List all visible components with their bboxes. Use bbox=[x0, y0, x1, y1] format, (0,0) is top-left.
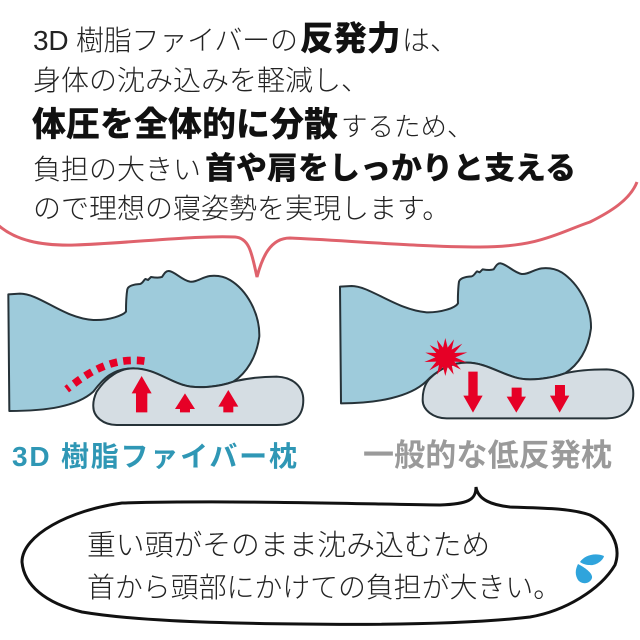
bubble text: 重い頭がそのまま沈み込むため bbox=[87, 530, 490, 562]
main explanatory text: ので理想の寝姿勢を実現します。 bbox=[33, 193, 450, 224]
up arrows bbox=[132, 376, 238, 412]
main explanatory text: 3D 樹脂ファイバーの bbox=[33, 25, 298, 56]
speech bubble: black outline bbox=[22, 487, 617, 624]
main explanatory text: 首や肩をしっかりと支える bbox=[205, 151, 576, 186]
speech bubble: red outline bbox=[0, 182, 637, 277]
icon: sweat drops bbox=[576, 554, 604, 583]
dashed neck support curve bbox=[67, 360, 148, 389]
bubble text bbox=[87, 530, 561, 603]
main explanatory text bbox=[32, 21, 576, 224]
main explanatory text: は、 bbox=[402, 25, 458, 56]
label: 3D resin fiber pillow: 3D 樹脂ファイバー枕 bbox=[12, 441, 297, 472]
bubble text: 首から頭部にかけての負担が大きい。 bbox=[87, 572, 561, 603]
main explanatory text: するため、 bbox=[341, 112, 474, 142]
pain burst bbox=[424, 338, 467, 376]
pillow bbox=[423, 363, 633, 418]
main explanatory text: 身体の沈み込みを軽減し、 bbox=[33, 65, 369, 96]
main explanatory text: 反発力 bbox=[300, 21, 400, 58]
diagram: low-rebound pillow bbox=[340, 263, 633, 418]
pillow bbox=[93, 368, 303, 425]
body and head silhouette bbox=[8, 271, 259, 411]
label: low-rebound pillow: 一般的な低反発枕 bbox=[363, 438, 612, 473]
down arrows bbox=[463, 372, 569, 413]
main explanatory text: 体圧を全体的に分散 bbox=[32, 106, 338, 144]
body and head silhouette bbox=[340, 263, 591, 403]
main explanatory text: 負担の大きい bbox=[33, 154, 201, 185]
diagram: 3D resin fiber pillow bbox=[8, 271, 303, 425]
